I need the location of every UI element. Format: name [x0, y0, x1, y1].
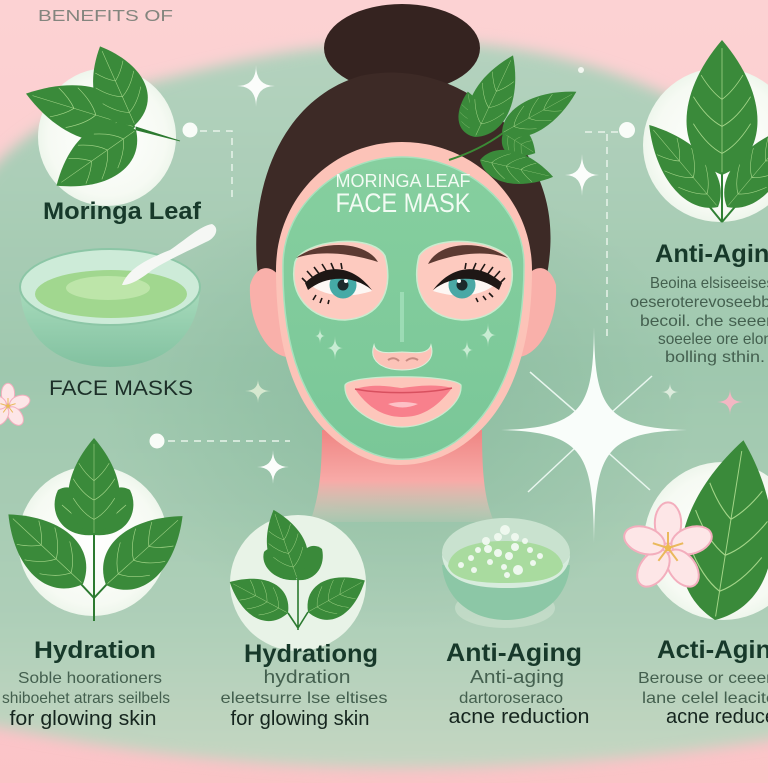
panel: moringa leaf: [18, 36, 216, 400]
description: [2, 670, 170, 730]
face illustration: [250, 4, 584, 522]
eyes: [302, 263, 505, 304]
description: eleetsurre lse eltises: [220, 690, 388, 707]
description: Anti-aging: [470, 667, 564, 687]
sparkles: [237, 65, 743, 484]
large sparkle: [501, 327, 687, 543]
label: moringa leaf: Moringa Leaf: [43, 198, 202, 225]
eyebrows: [296, 245, 508, 264]
leaf icon: [221, 504, 374, 651]
icon: bowl: [442, 518, 570, 628]
heading: Hydration: [34, 637, 156, 664]
ears: [250, 268, 556, 357]
panel: hydration left: [0, 438, 201, 730]
small heading: benefits of: BENEFITS OF: [38, 8, 173, 25]
lips: [355, 386, 452, 417]
description: [448, 667, 590, 728]
heading: Anti-Aging: [446, 639, 582, 667]
mask title: MORINGA LEAF: [336, 171, 470, 191]
mask sparkle marks: [315, 323, 496, 360]
description: bolling sthin.: [665, 349, 765, 366]
leaf icon: [621, 433, 768, 627]
panel: hydrating center: [220, 504, 388, 730]
description: dartoroseraco: [459, 690, 563, 707]
description: [630, 275, 768, 366]
heading: Hydrationg: [244, 640, 378, 668]
description: for glowing skin: [230, 708, 370, 730]
flower left edge: [0, 383, 32, 428]
mouth opening: [345, 377, 461, 427]
neck: [310, 430, 494, 522]
panel: anti-aging center: [442, 518, 590, 728]
small dot: [578, 67, 584, 73]
description: lane celel leacite: [642, 690, 768, 707]
description: [220, 667, 388, 730]
moringa leaf icon: [18, 36, 180, 207]
hair: [256, 73, 551, 280]
eye openings: [294, 241, 512, 320]
mask title: [336, 171, 470, 218]
nose highlight: [400, 292, 404, 342]
panel: acti-aging right: [621, 433, 768, 728]
connector dot: [182, 122, 198, 138]
nostrils: [388, 358, 418, 361]
panel: anti-aging top right: [578, 40, 768, 366]
mask title: FACE MASK: [336, 188, 470, 218]
description: for glowing skin: [10, 708, 156, 730]
description: oeseroterevoseebbl: [630, 294, 768, 311]
connector dot: [619, 122, 635, 138]
dashed connectors: [168, 131, 618, 441]
description: becoil. che seeer: [640, 313, 768, 330]
hair bun: [324, 4, 480, 92]
description: Soble hoorationers: [18, 670, 162, 687]
description: shiboehet atrars seilbels: [2, 690, 170, 707]
face skin: [276, 142, 532, 465]
dot left connector: [150, 434, 164, 448]
description: acne reduction: [448, 706, 590, 728]
mask: [283, 157, 524, 459]
leaves in hair: [449, 47, 584, 193]
leaf icon: [632, 40, 768, 222]
description: [638, 670, 768, 728]
nose opening: [373, 345, 432, 370]
description: Berouse or ceeer: [638, 670, 768, 687]
label: face masks: FACE MASKS: [49, 377, 193, 400]
description: hydration: [264, 667, 350, 687]
leaf icon: [0, 438, 201, 621]
icon: bowl of paste: [20, 224, 216, 367]
